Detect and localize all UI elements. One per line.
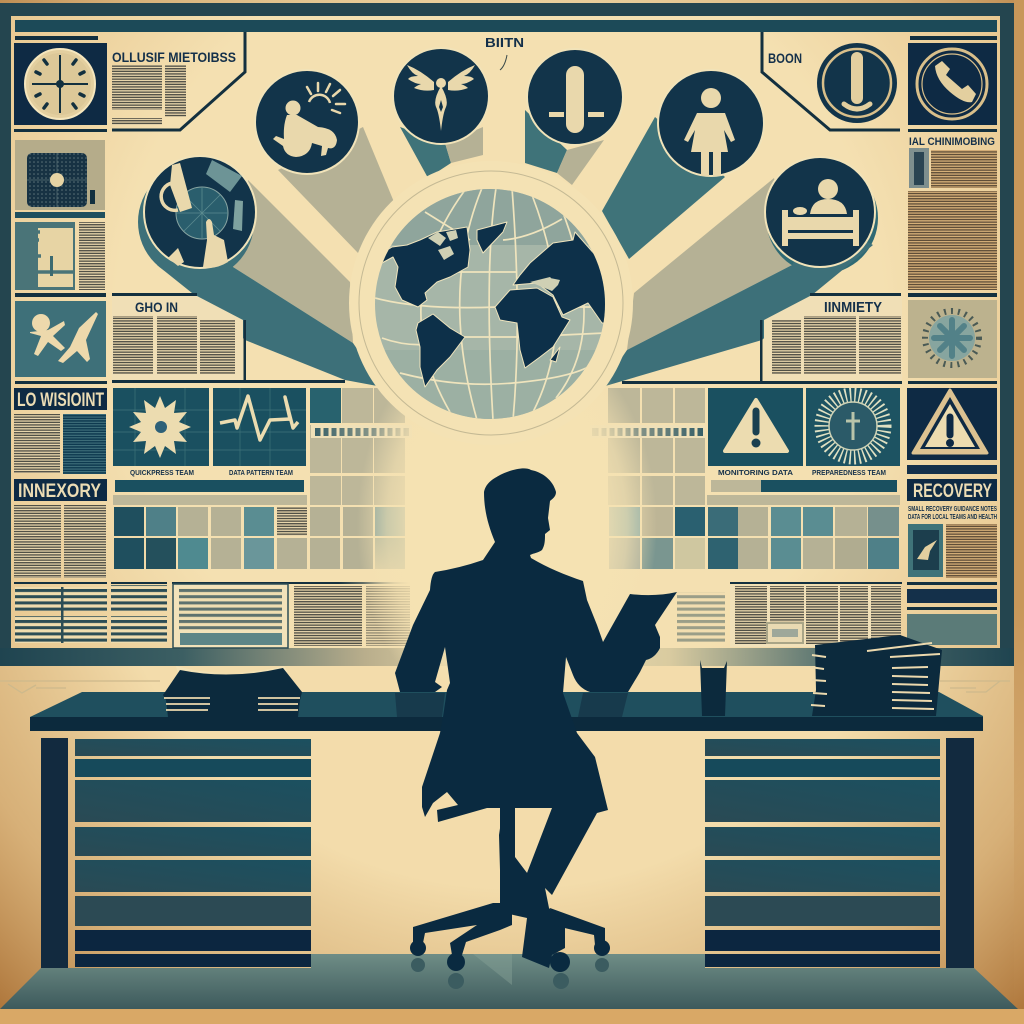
office chair (410, 808, 610, 972)
panel: chart thumbnail (15, 222, 106, 297)
captions: right icons: PREPAREDNESS TEAM (812, 468, 886, 477)
panel: right article (622, 293, 902, 384)
panel: bottom striped chart (172, 582, 410, 648)
heading: left section one: LO WISIOINT (17, 390, 104, 411)
panel: right text column: IAL CHINIMOBING (909, 136, 995, 148)
title: top center (485, 35, 524, 70)
heading: recovery: RECOVERY (913, 481, 992, 502)
panel: left text article: GHO IN (135, 299, 178, 315)
panel: bottom right bars (907, 582, 997, 645)
icon: patient in bed (765, 157, 875, 267)
panel: burst icon (113, 388, 209, 466)
floor (0, 954, 1018, 1009)
icon: hands with dial (144, 156, 256, 268)
globe (349, 161, 633, 445)
icon: pill bar (527, 49, 623, 145)
icon: child and light (255, 70, 359, 174)
text block: left section one (14, 414, 106, 474)
grid: right squares (609, 507, 899, 569)
panel: bottom right text (677, 582, 902, 647)
icon: winged staff (393, 48, 489, 144)
panel: telephone icon (908, 36, 997, 132)
panel: top right label box: BOON (768, 50, 802, 66)
text block: bottom left fading (294, 586, 410, 646)
panel: pulse line (213, 388, 306, 466)
bar: right section (707, 480, 900, 505)
analyst silhouette (395, 468, 677, 968)
wheel reflections (411, 958, 609, 989)
captions: right icons: MONITORING DATA (718, 468, 794, 477)
title: top center: BIITN (485, 35, 524, 50)
panel: top right label box (762, 32, 900, 130)
desk cabinet: right (705, 738, 974, 968)
desk (30, 692, 983, 731)
panel: television (15, 140, 105, 218)
icon: standing figure (658, 70, 764, 176)
text block: left section two (14, 505, 106, 578)
panel: top left text: OLLUSIF MIETOIBSS (112, 49, 236, 65)
poster frame (0, 3, 1014, 666)
light beams from icons to globe (138, 110, 878, 387)
heading: recovery (907, 479, 997, 502)
panel: right article: IINMIETY (824, 299, 882, 316)
desk cabinet: left (41, 738, 311, 968)
panel: top left text (112, 32, 245, 130)
panel: bottom left tables (14, 582, 167, 643)
panel: seal (908, 300, 997, 384)
captions: left icons: DATA PATTERN TEAM (229, 468, 293, 477)
panel: radiant disc (806, 388, 900, 466)
grid: left squares (114, 507, 405, 569)
captions: right icons (718, 468, 886, 477)
panel: warning sign (907, 388, 997, 474)
paper stack: left (163, 666, 302, 717)
captions: left icons (130, 468, 293, 477)
grid: right upper cells (590, 388, 705, 505)
panel: left text article (112, 293, 345, 383)
panel: top left clock (14, 36, 107, 132)
paper stack: right (810, 635, 942, 716)
panel: figures (15, 301, 107, 384)
center fade behind analyst (357, 320, 657, 730)
captions: left icons: QUICKPRESS TEAM (130, 468, 194, 477)
heading: left section one (14, 388, 107, 411)
cup (700, 660, 727, 716)
panel: right text column (908, 136, 997, 297)
bar: left section (113, 480, 307, 505)
heading: left section two: INNEXORY (18, 481, 101, 502)
panel: recovery content (908, 504, 997, 578)
grid: left upper cells (310, 388, 412, 505)
wall trim lines (0, 681, 1010, 693)
panel: warning triangle (708, 388, 803, 466)
